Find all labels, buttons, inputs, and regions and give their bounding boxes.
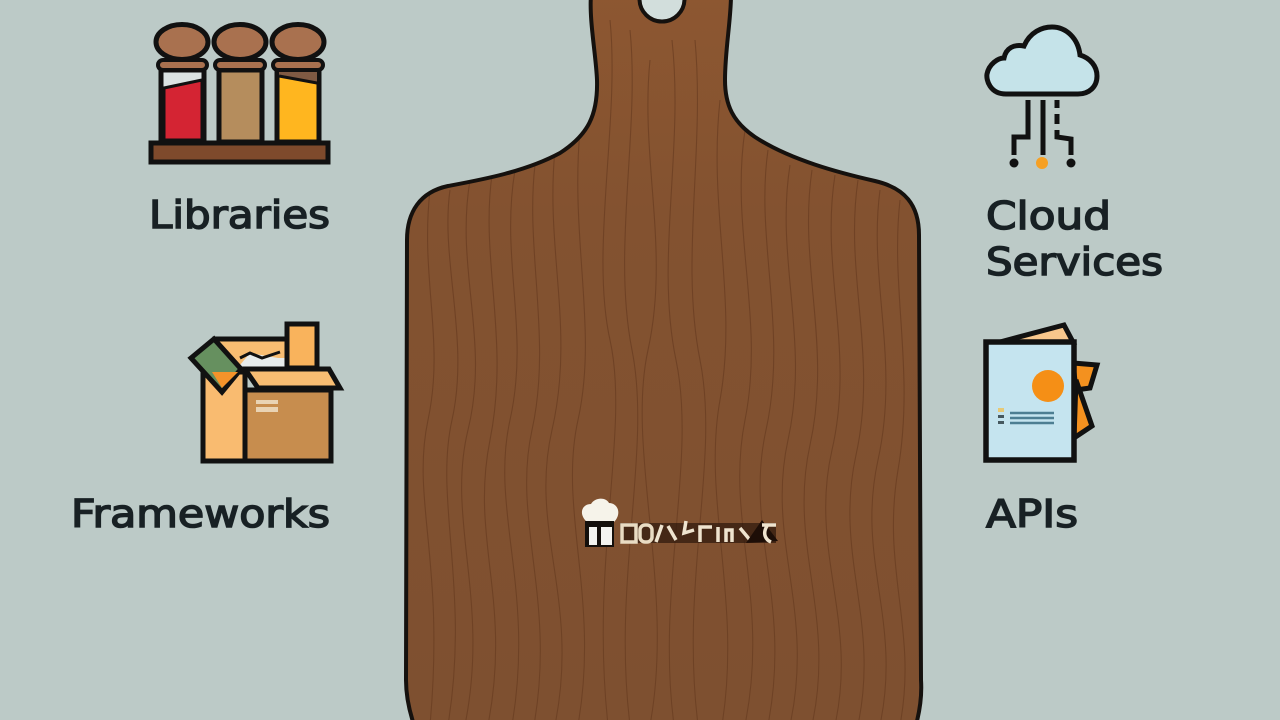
garbled wordmark: [620, 520, 778, 543]
item: libraries: [149, 24, 330, 237]
board hanging hole: [640, 0, 684, 22]
item: frameworks: [71, 324, 340, 536]
label: APIs: APIs: [986, 492, 1078, 536]
label: Frameworks: Frameworks: [71, 492, 330, 536]
cutting board: [406, 0, 921, 720]
board logo: [582, 499, 778, 547]
item: APIs: [986, 325, 1097, 536]
icon: spice rack: [151, 24, 328, 162]
icon: open box: [191, 324, 340, 461]
icon: brochure document: [986, 325, 1097, 460]
item: cloud services: Services: [986, 240, 1163, 284]
label: Cloud Services: Cloud: [986, 194, 1111, 238]
icon: chef hat: [582, 499, 618, 547]
item: cloud services: [986, 27, 1163, 284]
label: Libraries: Libraries: [149, 193, 330, 237]
icon: cloud with circuit lines: [987, 27, 1097, 169]
